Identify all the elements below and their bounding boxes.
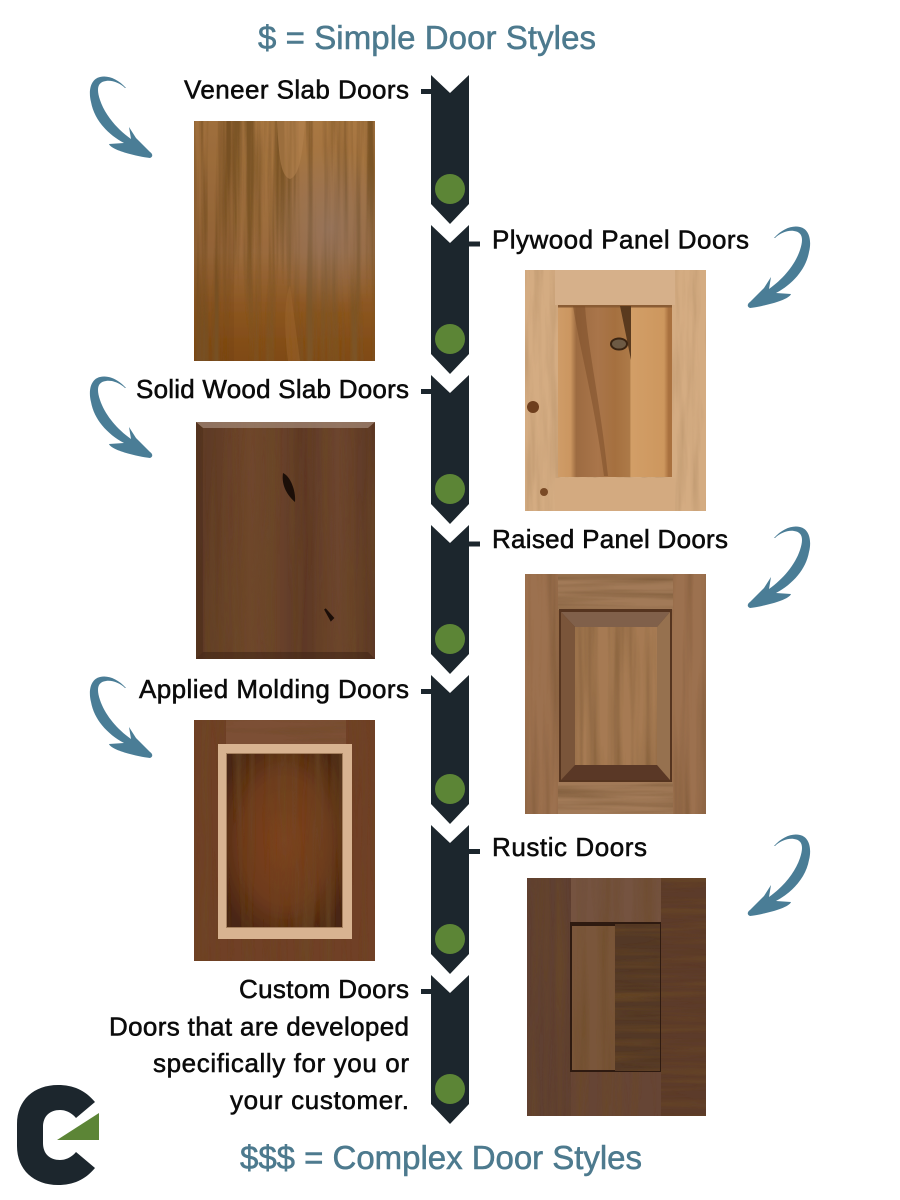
door: plywood panel <box>525 270 706 511</box>
door: solid wood slab <box>196 422 375 659</box>
label: custom doors description: Custom Doors <box>239 974 409 1004</box>
arrow: raised panel <box>748 526 810 608</box>
label: rustic doors: Rustic Doors <box>492 832 647 862</box>
timeline: chevron spine <box>431 75 469 1124</box>
arrow: solid wood <box>90 376 152 458</box>
chevron 7 <box>431 975 469 1124</box>
chevron 5 <box>431 675 469 824</box>
chevron 1 <box>431 75 469 224</box>
label: custom doors description <box>109 974 409 1115</box>
label: custom doors description: specifically for you or <box>153 1048 409 1078</box>
footer title: complex door styles: $$$ = Complex Door Styles <box>240 1139 642 1176</box>
label: veneer slab doors: Veneer Slab Doors <box>184 74 409 104</box>
chevron 4 <box>431 525 469 674</box>
connector ticks <box>421 89 480 994</box>
chevron 2 <box>431 225 469 374</box>
arrow: plywood <box>748 226 810 308</box>
chevron 3 <box>431 375 469 524</box>
door: rustic <box>527 878 706 1116</box>
title: simple door styles: $ = Simple Door Styles <box>258 19 596 56</box>
label: custom doors description: Doors that are developed <box>109 1012 409 1042</box>
door: raised panel <box>525 574 706 814</box>
arrow: applied molding <box>90 676 152 758</box>
door: veneer slab <box>194 121 375 361</box>
label: applied molding doors: Applied Molding Doors <box>139 674 409 704</box>
label: plywood panel doors: Plywood Panel Doors <box>492 224 749 254</box>
label: raised panel doors: Raised Panel Doors <box>492 524 728 554</box>
chevron 6 <box>431 825 469 974</box>
label: custom doors description: your customer. <box>230 1085 409 1115</box>
arrow: veneer <box>90 76 152 158</box>
door: applied molding <box>194 720 375 961</box>
label: solid wood slab doors: Solid Wood Slab Doors <box>136 374 409 404</box>
logo <box>17 1085 99 1185</box>
arrow: rustic <box>748 834 810 916</box>
